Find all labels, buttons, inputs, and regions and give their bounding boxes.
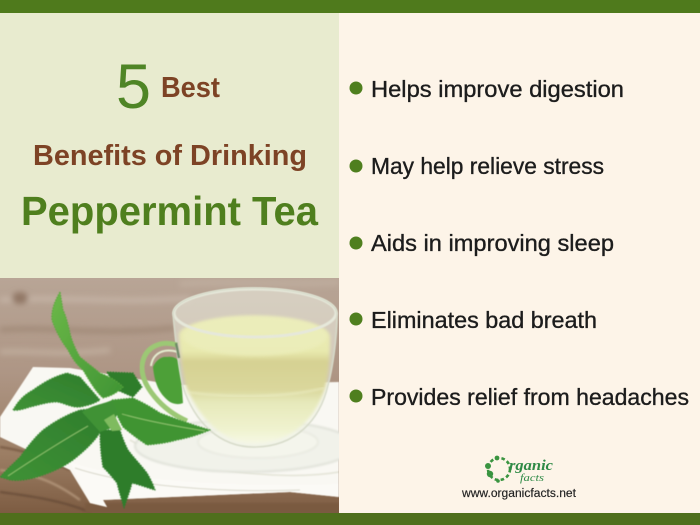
title panel — [0, 13, 339, 278]
leaf: left upper — [13, 373, 100, 410]
tea liquid — [179, 316, 330, 443]
top green bar — [0, 0, 700, 13]
leaf: centre — [82, 400, 118, 432]
white napkin — [0, 367, 339, 507]
wooden table — [0, 278, 339, 513]
benefits list — [350, 76, 689, 410]
glass cup — [142, 288, 337, 447]
bullet 1: Helps improve digestion: Helps improve digestion — [371, 76, 624, 102]
photo: peppermint tea cup with leaves — [0, 278, 355, 513]
logo wordmark: rganic — [509, 458, 553, 474]
logo: Organic Facts — [461, 456, 577, 500]
website URL: www.organicfacts.net — [461, 488, 577, 500]
icon: leaf ring — [485, 456, 510, 483]
title: Benefits of Drinking: Benefits of Drinking — [33, 140, 307, 172]
title: Peppermint Tea: Peppermint Tea — [21, 188, 319, 234]
glass saucer — [135, 420, 355, 472]
bullet 5: Provides relief from headaches: Provides relief from headaches — [371, 384, 689, 410]
title: number 5: 5 — [116, 52, 151, 122]
leaf: right — [112, 398, 210, 445]
bullet 4: Eliminates bad breath: Eliminates bad breath — [371, 307, 597, 333]
leaf: bottom — [100, 430, 155, 508]
leaf: top — [52, 292, 123, 398]
leaf: left lower — [0, 407, 107, 480]
background leaf behind the handle — [153, 357, 183, 404]
bullet 3: Aids in improving sleep: Aids in improving sleep — [371, 230, 614, 256]
logo subtext: facts — [520, 473, 544, 484]
leaf: right small — [107, 372, 142, 397]
title: Best: Best — [161, 72, 220, 104]
bullet 2: May help relieve stress: May help relieve stress — [371, 153, 604, 179]
mint sprig — [0, 292, 210, 508]
cup handle — [142, 343, 187, 421]
bottom green bar — [0, 513, 700, 525]
